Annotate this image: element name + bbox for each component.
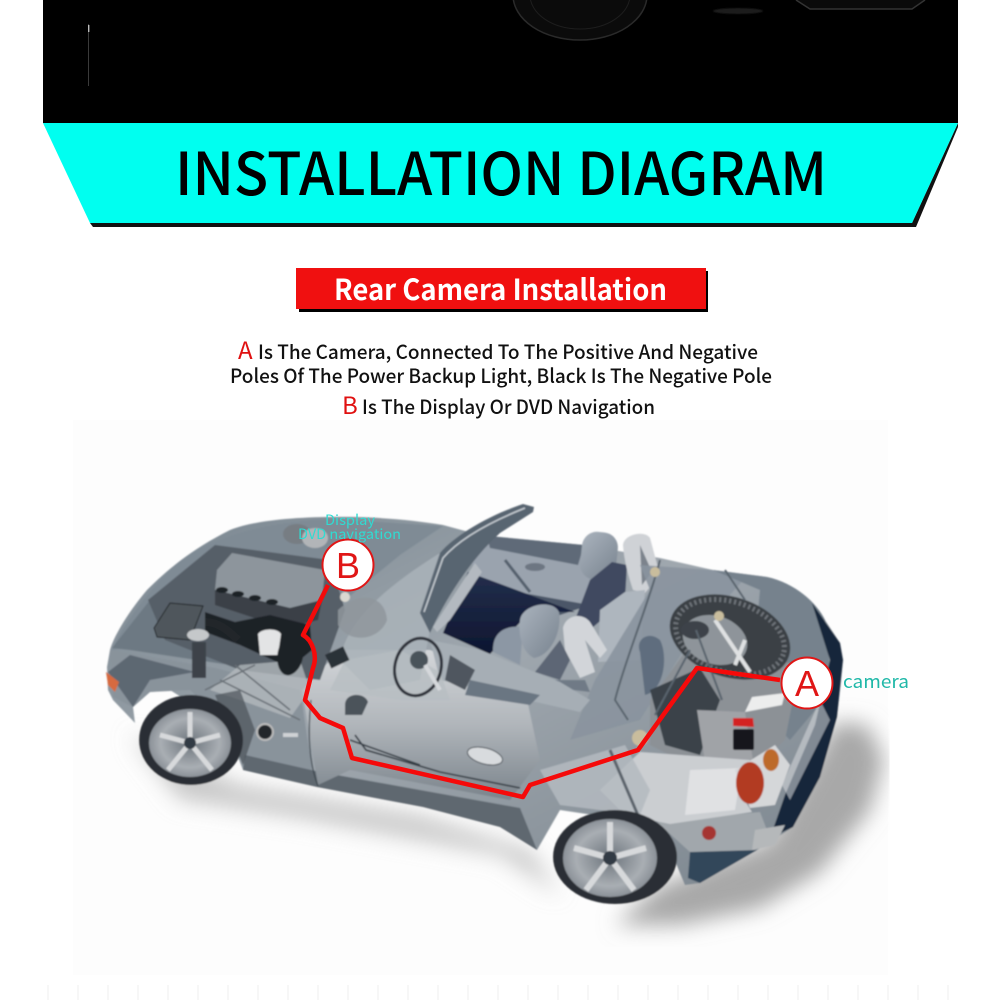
marker A: A xyxy=(795,663,819,704)
car body shell xyxy=(107,517,843,885)
tail lights xyxy=(702,745,790,840)
windshield frame xyxy=(420,504,534,633)
front wheel xyxy=(139,695,243,785)
top black product panel xyxy=(43,0,958,123)
cabin door inner trim xyxy=(470,540,600,610)
trunk interior xyxy=(650,645,800,768)
marker A xyxy=(782,658,832,708)
description text: Is The Display Or DVD Navigation xyxy=(362,391,655,420)
front fender xyxy=(110,650,313,775)
rear transparent shell xyxy=(570,565,745,740)
label: display dvd navigation xyxy=(298,510,401,544)
transparent fender mesh xyxy=(215,690,255,765)
rear seats xyxy=(520,530,660,692)
ground shadow xyxy=(130,722,884,925)
rear dark panel xyxy=(770,603,843,838)
label: display dvd navigation: Display xyxy=(325,510,376,530)
description text: A xyxy=(238,331,253,366)
car cutaway illustration xyxy=(106,504,884,925)
bmw badge xyxy=(257,724,273,740)
door panel xyxy=(302,650,540,800)
marker B xyxy=(322,540,374,590)
engine bay xyxy=(148,524,387,720)
title banner xyxy=(43,123,958,227)
description text: Is The Camera, Connected To The Positive And Negative xyxy=(258,336,758,365)
door wiring xyxy=(350,735,520,788)
front seat cushion xyxy=(493,627,523,665)
rear frame rails xyxy=(615,560,745,720)
lower sill xyxy=(243,755,537,850)
hood rim shade xyxy=(112,600,230,665)
console xyxy=(430,640,590,712)
label: display dvd navigation: DVD navigation xyxy=(298,524,401,544)
description text: Poles Of The Power Backup Light, Black Is The Negative Pole xyxy=(230,360,772,389)
door handle xyxy=(466,744,504,768)
rear wheel xyxy=(553,810,677,904)
cabin dark floor xyxy=(443,572,575,654)
spare tire xyxy=(659,580,801,694)
section heading button: Rear Camera Installation xyxy=(334,267,667,309)
description text xyxy=(230,331,772,421)
windshield base glass xyxy=(340,553,440,690)
steering wheel and dash xyxy=(325,633,450,715)
rear trunk parts xyxy=(632,567,785,750)
photo backdrop xyxy=(73,420,888,975)
front headlight xyxy=(106,672,119,692)
red wiring route xyxy=(303,585,780,797)
marker B: B xyxy=(336,545,360,586)
title: INSTALLATION DIAGRAM xyxy=(175,127,827,212)
label: camera: camera xyxy=(843,668,909,694)
hood surface xyxy=(112,519,443,650)
rear bumper xyxy=(657,812,770,852)
description text: B xyxy=(342,386,358,421)
rear deck xyxy=(713,570,832,740)
